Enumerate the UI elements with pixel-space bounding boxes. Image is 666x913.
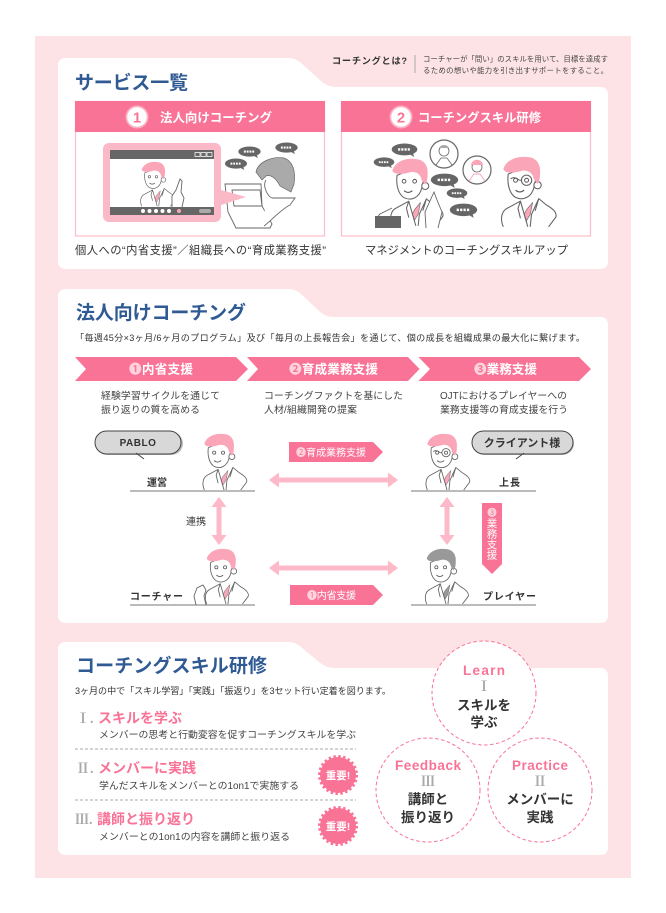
circle: Feedback: Ⅲ <box>421 775 435 790</box>
tag: reflection support: ❶内省支援 <box>307 589 356 602</box>
item 3: feedback <box>75 811 290 843</box>
coaching definition: コーチングとは? <box>332 55 407 66</box>
tag: development support: ❷育成業務支援 <box>296 446 366 459</box>
card 2 caption: マネジメントのコーチングスキルアップ <box>365 243 569 257</box>
heading: skill training: コーチングスキル研修 <box>76 654 267 677</box>
tag: development support <box>289 442 383 462</box>
arrow: top horizontal <box>269 472 398 488</box>
person: manager: 上長 <box>499 476 520 489</box>
panel: service list <box>58 54 608 269</box>
person: player: プレイヤー <box>483 591 536 603</box>
tag: business support <box>482 503 502 574</box>
coaching definition: るための想いや能力を引き出すサポートをすること。 <box>423 66 608 75</box>
callout: PABLO <box>95 431 183 459</box>
item 2: practice <box>76 760 299 792</box>
label: collaboration: 連携 <box>186 515 206 528</box>
panel background <box>58 642 608 855</box>
badge: important 2: 重要! <box>326 820 350 833</box>
step 3 text: 業務支援等の育成支援を行う <box>440 403 568 416</box>
circle: Feedback: 講師と <box>408 791 448 807</box>
circle: Learn: Ⅰ <box>477 680 491 695</box>
step arrow 1 <box>75 357 248 381</box>
circle: Feedback <box>376 738 480 842</box>
item 3: feedback: 講師と振り返り <box>97 811 195 827</box>
heading: corporate coaching: 法人向けコーチング <box>76 301 246 324</box>
intro text: 3ヶ月の中で「スキル学習」「実践」「振返り」を3セット行い定着を図ります。 <box>75 685 391 696</box>
person: manager <box>411 434 536 491</box>
card 1 caption: 個人への“内省支援”／組織長への“育成業務支援” <box>75 243 326 257</box>
step 2 text: コーチングファクトを基にした <box>264 389 403 402</box>
callout: client <box>472 431 574 459</box>
circle: Feedback: 振り返り <box>401 809 455 825</box>
badge: important 2 <box>320 808 356 844</box>
panel: skill training <box>58 641 608 855</box>
badge: important 1: 重要! <box>326 769 350 782</box>
arrow: right vertical <box>440 497 454 545</box>
circle: Learn: 学ぶ <box>470 714 498 730</box>
step arrow 2 <box>247 357 420 381</box>
illustration: online coaching <box>103 142 298 228</box>
illustration: training <box>374 140 556 228</box>
tag: business support: 援 <box>487 548 498 562</box>
item 2: practice: メンバーに実践 <box>98 760 196 776</box>
circle: Practice: Practice <box>512 758 568 773</box>
tag: reflection support <box>290 585 383 605</box>
callout: PABLO: PABLO <box>120 438 156 449</box>
tag: business support: 業 <box>487 517 498 530</box>
circle: Feedback: Feedback <box>395 758 461 773</box>
step 2 text <box>264 389 403 416</box>
tag: business support: 務 <box>487 528 498 540</box>
item 1: learn: スキルを学ぶ <box>98 710 182 726</box>
item 1: learn: Ⅰ. <box>76 712 94 727</box>
person: operations: 運営 <box>147 476 167 489</box>
callout: client: クライアント様 <box>484 436 560 450</box>
circle: Practice <box>488 738 592 842</box>
person: operations <box>130 434 255 491</box>
item 2: practice: Ⅱ. <box>76 762 94 777</box>
circle: Learn <box>432 641 536 745</box>
item 2: practice: 学んだスキルをメンバーとの1on1で実施する <box>99 779 299 792</box>
tag: business support: ❸ <box>487 508 497 519</box>
arrow: bottom horizontal <box>269 560 398 576</box>
item 1: learn: メンバーの思考と行動変容を促すコーチングスキルを学ぶ <box>99 728 356 741</box>
tag: business support: 支 <box>487 539 498 551</box>
card 2: coaching skill training <box>341 101 591 236</box>
arrow: left vertical <box>212 497 226 545</box>
step 2 text: 人材/組織開発の提案 <box>264 403 357 416</box>
step 1 text: 振り返りの質を高める <box>101 403 200 416</box>
card 1: corporate coaching: 法人向けコーチング <box>160 110 273 125</box>
step arrow 1: ❶内省支援 <box>129 362 193 376</box>
circle: Practice: 実践 <box>526 809 554 825</box>
card 2: coaching skill training: コーチングスキル研修 <box>418 110 542 125</box>
card 1: corporate coaching: 1 <box>133 110 141 126</box>
panel: corporate coaching <box>58 289 608 623</box>
badge: important 1 <box>320 756 356 794</box>
step arrow 3: ❸業務支援 <box>474 362 537 376</box>
card 1: corporate coaching <box>75 101 325 236</box>
step 3 text <box>440 390 568 416</box>
step 3 text: OJTにおけるプレイヤーへの <box>440 390 567 402</box>
item 3: feedback: Ⅲ. <box>75 813 92 828</box>
person: player <box>411 549 536 605</box>
coaching definition <box>332 54 608 75</box>
step 1 text: 経験学習サイクルを通じて <box>101 389 220 402</box>
heading: service list: サービス一覧 <box>75 72 188 94</box>
coaching definition: コーチャーが「問い」のスキルを用いて、目標を達成す <box>423 54 608 64</box>
item 3: feedback: メンバーとの1on1の内容を講師と振り返る <box>99 830 290 843</box>
item 1: learn <box>76 710 356 741</box>
step arrow 3 <box>418 357 591 381</box>
step arrow 2: ❷育成業務支援 <box>289 362 378 376</box>
panel background <box>58 289 608 623</box>
circle: Practice: Ⅱ <box>533 775 547 790</box>
step 1 text <box>101 389 220 416</box>
card 2: coaching skill training: 2 <box>397 110 405 126</box>
panel background <box>58 58 608 269</box>
person: coach <box>130 549 255 605</box>
circle: Practice: メンバーに <box>506 792 574 807</box>
circle: Learn: Learn <box>463 663 505 678</box>
person: coach: コーチャー <box>130 591 183 603</box>
circle: Learn: スキルを <box>457 698 511 713</box>
intro text: 「毎週45分×3ヶ月/6ヶ月のプログラム」及び「毎月の上長報告会」を通じて、個の成長を組織成果の最大化に繋げます。 <box>75 332 585 343</box>
